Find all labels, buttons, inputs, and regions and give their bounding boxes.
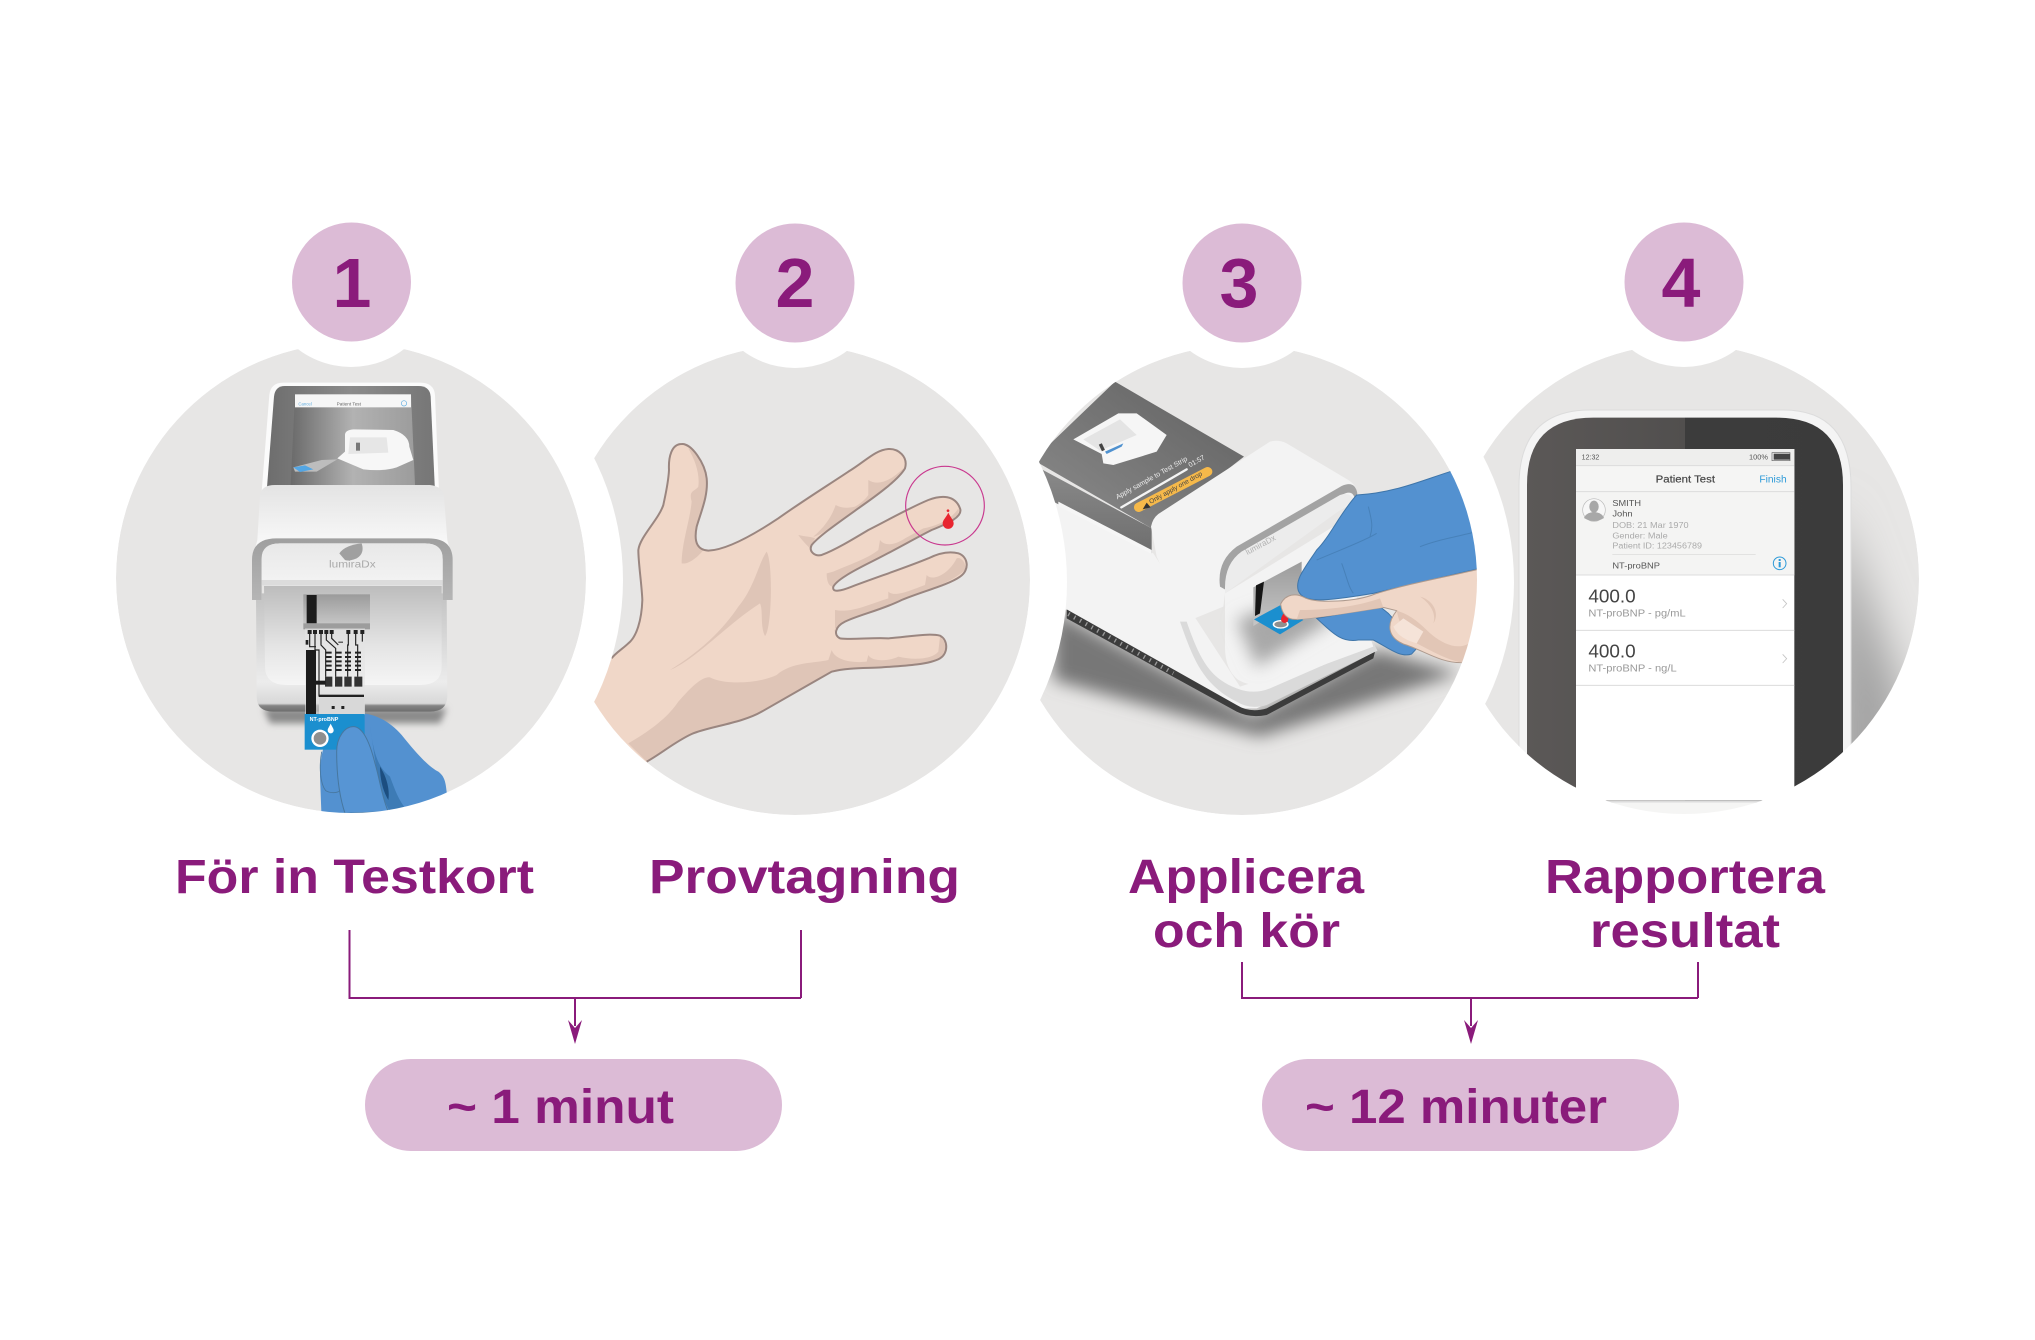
number badge 3 [1182,224,1302,342]
analyser interior [1225,527,1373,685]
analyser body [1050,502,1377,708]
label: step 3 [1128,851,1364,958]
patient details [1612,499,1756,570]
analyser shadow [263,708,447,723]
panel: step 3 apply and run [1007,345,1480,815]
cartridge slot [303,594,370,624]
time pill: about 1 minute [365,1059,782,1151]
patient avatar [1583,499,1605,521]
illustration: test strip and glove [305,628,447,820]
number badge 2: 2 [776,244,814,322]
patient details: Patient ID: 123456789 [1612,542,1703,551]
analyser screen housing [262,383,439,492]
patient details: John [1612,510,1633,519]
number badge 4 [1624,222,1744,342]
infographic: four-step test workflow [116,222,1919,1151]
label: step 4 [1545,851,1825,958]
screen foot [1576,802,1794,822]
patient details: DOB: 21 Mar 1970 [1612,521,1689,530]
analyser display [291,394,415,485]
analyser screen: Apply sample to Test Strip [1115,456,1189,501]
glove [320,713,447,820]
label: step 4: resultat [1590,905,1780,958]
illustration: analyser front view [252,383,453,723]
time pill: about 12 minutes [1262,1059,1679,1151]
device shadow [1830,500,1905,860]
panel: step 1 insert test strip [116,343,586,820]
blue test card: NT-proBNP [310,717,339,723]
analyser base vents [1067,609,1375,716]
title bar: Finish [1759,475,1787,486]
info icon [1773,557,1786,570]
analyser screen [1033,382,1244,528]
logo text: lumiraDx [1244,532,1278,557]
monitor casing [1519,410,1851,887]
status bar [1582,452,1790,461]
analyser shadow [1053,610,1460,737]
time pill: about 12 minutes: ~ 12 minuter [1305,1081,1607,1134]
hand shading [628,448,965,762]
result row pg/mL [1588,586,1787,620]
blue test card [305,714,365,750]
glove back fingers [1317,607,1418,655]
blood drop [943,509,954,529]
analyser cover [1151,441,1357,622]
fingertip highlight circle [906,466,984,545]
illustration: monitor with results [1519,410,1851,887]
analyser cover arch [252,538,453,600]
panel: step 2 blood sampling [594,351,1030,815]
number badge 4: 4 [1662,244,1701,322]
glove hand [1298,447,1480,600]
status bar: 100% [1749,452,1768,461]
background disc 1 [116,343,586,813]
cartridge slot [1253,562,1302,626]
hand outline [612,444,967,762]
strip circuit board [305,628,365,715]
glove thumb [337,727,388,813]
analyser bezel [1037,467,1152,553]
number badge 1: 1 [333,244,371,322]
illustration: hand with blood drop [594,443,985,762]
monitor bezel [1527,418,1843,887]
logo mark [339,543,363,561]
label: step 2: Provtagning [649,851,960,904]
time pill: about 1 minute: ~ 1 minut [447,1081,674,1134]
base highlight band [1180,622,1377,707]
result row pg/mL: NT-proBNP - pg/mL [1588,609,1686,620]
analyser opening [264,585,442,685]
background disc 2 [560,345,1030,815]
illustration: analyser with finger applying sample [1033,382,1480,737]
result row pg/mL: 400.0 [1588,586,1636,607]
bracket arrow: steps 3 and 4 [1242,962,1698,1044]
bare hand finger [1281,569,1480,663]
number badge 3: 3 [1220,244,1258,322]
result row ng/L: 400.0 [1588,641,1636,662]
result row ng/L [1588,641,1787,675]
title bar [1656,475,1787,486]
analyser display: Patient Test [337,401,362,406]
label: step 4: Rapportera [1545,851,1825,904]
thumb nail [1393,618,1423,643]
logo text: lumiraDx [329,560,376,571]
analyser lower body [256,593,447,712]
patient details: SMITH [1612,499,1641,508]
vent slots [1068,614,1173,673]
results screen [1576,449,1794,801]
analyser front panel [262,543,443,580]
bracket arrow: steps 1 and 2 [350,930,801,1044]
number badge 1 [292,222,411,342]
cover front panel [1225,494,1354,593]
label: step 1: För in Testkort [175,851,534,904]
patient details: NT-proBNP [1612,561,1660,570]
cover arch [1220,484,1357,590]
analyser screen: Only apply one drop [1148,471,1204,506]
analyser display: Cancel [298,401,312,406]
background disc 4 [1449,344,1919,814]
glove fold [372,743,404,810]
analyser cover [252,485,453,600]
number badge 2 [736,224,854,342]
glove finger [320,752,340,793]
analyser screen: 01:57 [1188,454,1206,469]
title bar: Patient Test [1656,475,1715,486]
patient details: Gender: Male [1612,531,1668,540]
blue test card [1254,605,1303,634]
result row ng/L: NT-proBNP - ng/L [1588,664,1677,675]
label: step 3: och kör [1153,905,1340,958]
glove creases [1317,507,1477,593]
panel: step 4 report result [1449,344,1919,887]
label: step 3: Applicera [1128,851,1364,904]
background disc 3 [1040,351,1462,815]
hand [594,445,966,762]
status bar: 12:32 [1582,452,1599,461]
analyser bezel [267,386,435,492]
finger shading [1297,597,1473,663]
interior shade [1237,593,1333,667]
